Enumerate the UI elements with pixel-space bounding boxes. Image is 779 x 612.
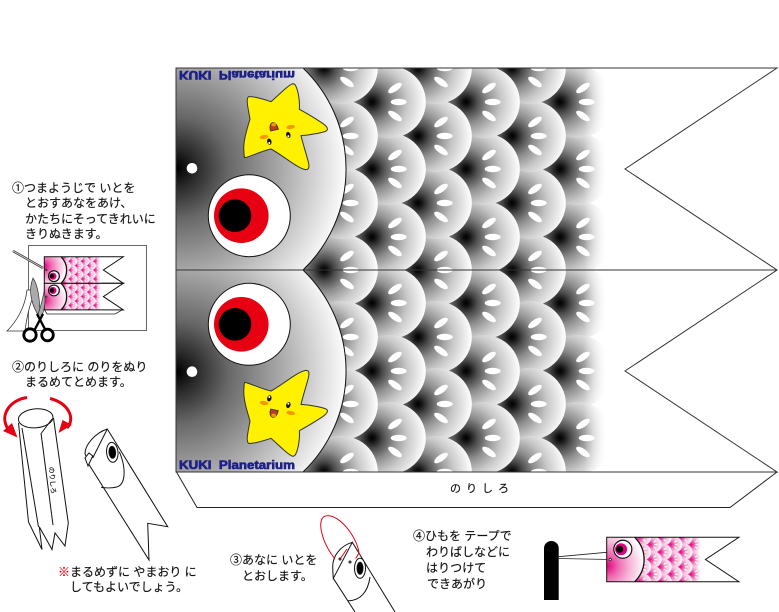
- step 1 text: かたちにそってきれいに: [25, 212, 156, 226]
- threading illustration: [321, 516, 395, 612]
- step 2 text: [12, 360, 147, 389]
- eye: [354, 558, 366, 578]
- eye: [106, 442, 119, 463]
- mini carp sheet: [44, 252, 123, 315]
- panel: upper carp half: [176, 32, 614, 306]
- star mascot: [244, 370, 327, 456]
- note text: してもよいでしょう。: [70, 580, 188, 594]
- step 1 text: ①つまようじで いとを: [12, 181, 135, 195]
- step 3 text: ③あなに いとを: [230, 553, 317, 567]
- panel: upper carp half: KUKI Planetarium: [179, 68, 295, 80]
- red string: [321, 516, 359, 559]
- tube label: のりしろ: [47, 466, 57, 494]
- finished carp on pole: [544, 529, 739, 600]
- icon: pole: [544, 541, 559, 600]
- folded carp illustration: [85, 429, 168, 560]
- step 1 text: とおすあなをあけ、: [25, 196, 132, 210]
- step 2 text: まるめてとめます。: [25, 375, 132, 389]
- note text: ※まるめずに やまおり に: [58, 565, 197, 579]
- icon: scissors: [24, 278, 53, 341]
- icon: toothpick: [13, 251, 43, 268]
- step 4 text: できあがり: [427, 576, 487, 591]
- step 2 text: ②のりしろに のりをぬり: [12, 360, 147, 374]
- step 4 text: わりばしなどに: [426, 545, 510, 559]
- strings: [559, 552, 610, 560]
- head: [176, 270, 346, 472]
- step 3 text: [230, 553, 317, 583]
- step 4 text: [413, 529, 512, 591]
- icon: cut paper curl: [7, 290, 36, 331]
- rolled tube illustration: [18, 407, 68, 550]
- step 1 text: [12, 181, 156, 241]
- note text: [58, 565, 197, 594]
- panel: lower carp half: [176, 234, 614, 508]
- step 4 text: ④ひもを テープで: [413, 529, 512, 543]
- step 1 text: きりぬきます。: [25, 227, 108, 241]
- string hole: [187, 366, 197, 377]
- flap label: のりしろ: [450, 482, 514, 495]
- step 1 illustration: [7, 246, 146, 341]
- eye: [208, 283, 290, 365]
- step 4 text: はりつけて: [426, 561, 486, 575]
- mini carp: [607, 529, 739, 590]
- panel: paste flap: [176, 472, 777, 508]
- carp outline and tails: [176, 68, 777, 472]
- icon: rotation arrows: [3, 398, 72, 438]
- step 3 text: とおします。: [242, 569, 313, 583]
- logo text: KUKI Planetarium: [179, 460, 295, 472]
